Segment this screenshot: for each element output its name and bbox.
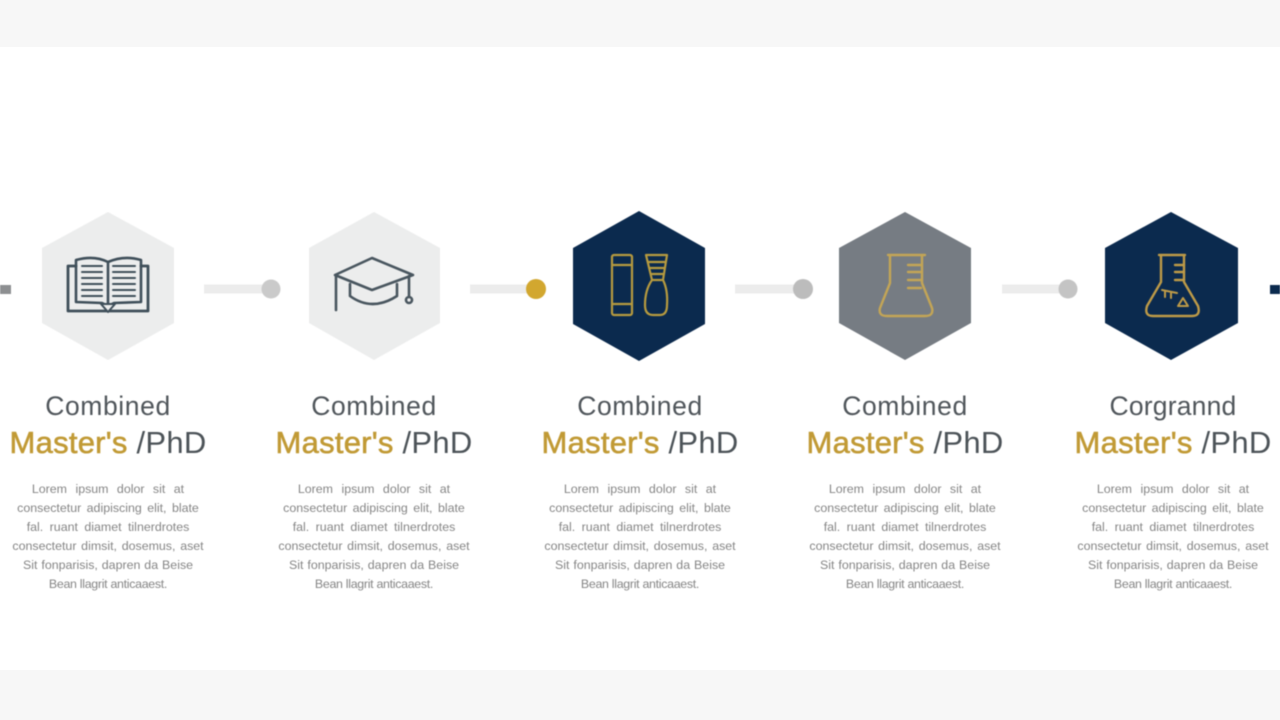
column 5 text	[1075, 391, 1271, 592]
column 2 text	[276, 391, 472, 592]
body text: Lorem ipsum dolor sit at	[32, 482, 184, 496]
connector 4	[1002, 280, 1078, 298]
body text: fal. ruant diamet tilnerdrotes	[27, 520, 189, 534]
body text: consectetur adipiscing elit, blate	[1082, 501, 1264, 515]
body text: Lorem ipsum dolor sit at	[298, 482, 450, 496]
hexagon 3 with test tubes icon	[573, 211, 705, 361]
icon: beaker	[880, 255, 932, 316]
column 3 text	[542, 391, 738, 592]
column 4 text	[807, 391, 1003, 592]
heading line: Combined	[45, 391, 171, 421]
heading line: Combined	[577, 391, 703, 421]
heading line: Combined	[842, 391, 968, 421]
body text	[544, 482, 736, 592]
body text	[278, 482, 470, 592]
body text: Lorem ipsum dolor sit at	[829, 482, 981, 496]
body text: fal. ruant diamet tilnerdrotes	[559, 520, 721, 534]
heading line: Combined	[311, 391, 437, 421]
timeline graphic	[0, 210, 1280, 362]
body text: Sit fonparisis, dapren da Beise	[555, 558, 725, 572]
hexagon 1 with open book icon	[42, 212, 174, 360]
body text	[12, 482, 204, 592]
body text: fal. ruant diamet tilnerdrotes	[1092, 520, 1254, 534]
connector 3	[735, 279, 813, 299]
connector 2	[470, 279, 546, 299]
right connector stub	[1270, 285, 1280, 294]
body text: consectetur dimsit, dosemus, aset	[1077, 539, 1269, 553]
body text: consectetur dimsit, dosemus, aset	[278, 539, 470, 553]
body text: consectetur adipiscing elit, blate	[814, 501, 996, 515]
body text: fal. ruant diamet tilnerdrotes	[293, 520, 455, 534]
body text: consectetur dimsit, dosemus, aset	[12, 539, 204, 553]
icon: open book	[68, 258, 148, 312]
degree title: Master's /PhD	[542, 425, 738, 460]
body text: Sit fonparisis, dapren da Beise	[820, 558, 990, 572]
body text: Bean llagrit anticaaest.	[1114, 577, 1232, 591]
body text: consectetur adipiscing elit, blate	[283, 501, 465, 515]
body text: consectetur adipiscing elit, blate	[549, 501, 731, 515]
icon: graduation cap	[335, 258, 413, 310]
body text: Bean llagrit anticaaest.	[581, 577, 699, 591]
body text: Bean llagrit anticaaest.	[846, 577, 964, 591]
hexagon 4 with beaker icon	[839, 212, 971, 360]
hexagon 5 with flask icon	[1105, 212, 1238, 360]
top band	[0, 0, 1280, 47]
body text: fal. ruant diamet tilnerdrotes	[824, 520, 986, 534]
body text: Sit fonparisis, dapren da Beise	[23, 558, 193, 572]
degree title: Master's /PhD	[807, 425, 1003, 460]
body text	[809, 482, 1001, 592]
degree title: Master's /PhD	[10, 425, 206, 460]
icon: tubes	[612, 255, 667, 315]
body text: Bean llagrit anticaaest.	[49, 577, 167, 591]
connector 1	[204, 280, 280, 298]
icon: flask	[1146, 255, 1199, 316]
body text: Sit fonparisis, dapren da Beise	[289, 558, 459, 572]
left connector stub	[0, 285, 11, 294]
degree title: Master's /PhD	[1075, 425, 1271, 460]
body text: Bean llagrit anticaaest.	[315, 577, 433, 591]
degree title: Master's /PhD	[276, 425, 472, 460]
body text: consectetur dimsit, dosemus, aset	[544, 539, 736, 553]
body text: consectetur dimsit, dosemus, aset	[809, 539, 1001, 553]
hexagon 2 with graduation cap icon	[309, 212, 440, 360]
body text: Sit fonparisis, dapren da Beise	[1088, 558, 1258, 572]
heading line: Corgrannd	[1109, 391, 1236, 421]
body text: Lorem ipsum dolor sit at	[1097, 482, 1249, 496]
body text: Lorem ipsum dolor sit at	[564, 482, 716, 496]
column 1 text	[10, 391, 206, 592]
bottom band	[0, 670, 1280, 720]
body text	[1077, 482, 1269, 592]
body text: consectetur adipiscing elit, blate	[17, 501, 199, 515]
